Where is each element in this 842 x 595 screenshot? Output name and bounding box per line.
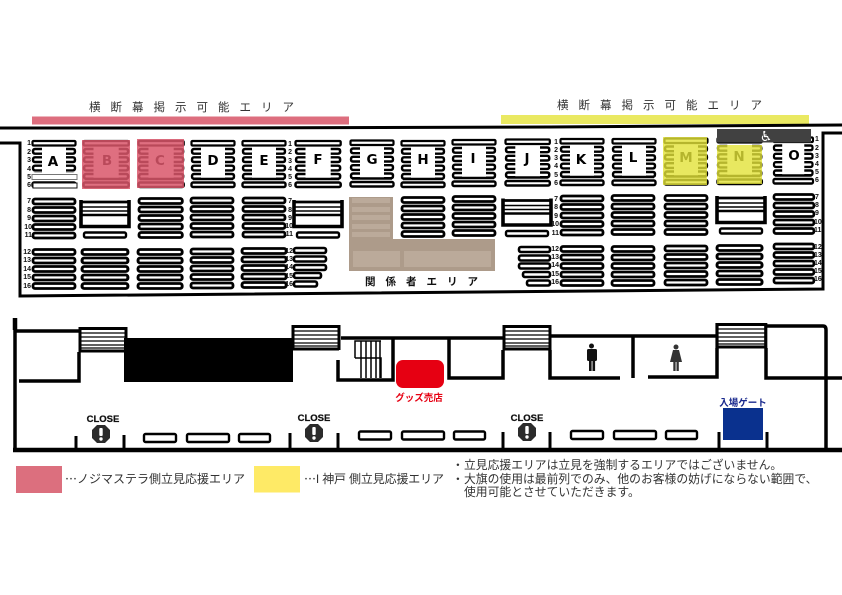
row numbers: centre left: 13 (285, 256, 293, 263)
notes: ・ (452, 472, 464, 486)
row numbers: centre right: 11 (552, 230, 559, 237)
row numbers: centre left: 10 (285, 223, 293, 230)
row numbers: left: 13 (23, 257, 31, 264)
row numbers: centre right: 6 (554, 180, 558, 187)
black block (124, 338, 293, 382)
row numbers: centre right: 13 (551, 254, 559, 261)
row numbers: centre left: 5 (288, 174, 292, 181)
highlight: B and C blocks (82, 139, 184, 189)
row numbers: left: 16 (23, 283, 31, 290)
staff area (349, 197, 495, 271)
block letters: O (788, 148, 800, 164)
block letters: G (366, 152, 378, 168)
notes: 立見応援エリアは立見を強制するエリアではございません。 (464, 458, 782, 472)
block letters: A (48, 154, 59, 170)
banner label: left: 横断幕掲示可能エリア (89, 100, 304, 114)
concourse walls (15, 326, 842, 450)
seating blocks: rows 12-16 (33, 244, 814, 288)
block letters: E (259, 153, 269, 169)
row numbers: left: 1 (27, 140, 31, 147)
row numbers: left: 14 (23, 266, 31, 273)
block letters: C (155, 153, 165, 169)
gate posts (76, 432, 767, 449)
row numbers: left: 8 (27, 207, 31, 214)
row numbers: centre left (285, 141, 293, 288)
row numbers: centre left: 7 (288, 198, 292, 205)
block letters: F (313, 152, 323, 168)
inner staircase (355, 341, 381, 378)
staff area label: 関係者エリア (365, 275, 488, 288)
notes: ・ (452, 458, 464, 472)
row numbers: right: 5 (815, 169, 819, 176)
row numbers: centre left: 8 (288, 207, 292, 214)
block letters: I (470, 151, 476, 167)
row numbers: centre right (551, 139, 559, 286)
row numbers: left: 6 (27, 182, 31, 189)
row numbers: right: 6 (815, 177, 819, 184)
row numbers: left: 15 (23, 274, 31, 281)
row numbers: right: 9 (815, 210, 819, 217)
seating blocks: rows 7-11 (33, 194, 814, 238)
notes (452, 458, 817, 499)
row numbers: right: 8 (815, 202, 819, 209)
close label 1: CLOSE (87, 414, 119, 425)
row numbers: left: 2 (27, 149, 31, 156)
row numbers: left: 9 (27, 215, 31, 222)
block letters: M (679, 150, 693, 166)
row numbers: centre right: 1 (554, 139, 558, 146)
row numbers: right: 12 (814, 244, 822, 251)
row numbers: right: 4 (815, 161, 819, 168)
concourse floor line (13, 318, 842, 450)
row numbers: right: 13 (814, 252, 822, 259)
row numbers: left: 12 (23, 249, 31, 256)
block letters (48, 148, 800, 170)
warning icon 2 (305, 424, 323, 442)
row numbers: centre right: 4 (554, 163, 558, 170)
row numbers: centre left: 1 (288, 141, 292, 148)
banner bar: pink (32, 116, 349, 124)
row numbers: left: 10 (24, 224, 32, 231)
row numbers: right (814, 136, 822, 283)
row numbers: right: 10 (814, 219, 822, 226)
row numbers: centre right: 16 (551, 279, 559, 286)
row numbers: right: 11 (814, 227, 822, 234)
wheelchair bar (717, 129, 811, 145)
close label 3: CLOSE (511, 413, 543, 424)
close label 2: CLOSE (298, 413, 330, 424)
row numbers: centre right: 2 (554, 147, 558, 154)
block letters: K (576, 152, 587, 168)
block letters: J (523, 151, 530, 167)
row numbers: centre right: 3 (554, 155, 558, 162)
wheelchair bar: ♿ (760, 129, 772, 145)
row numbers: right: 14 (814, 260, 822, 267)
warning icon 3 (518, 423, 536, 441)
row numbers: centre left: 16 (285, 281, 293, 288)
row numbers: right: 16 (814, 276, 822, 283)
row numbers: centre right: 8 (554, 204, 558, 211)
block letters: B (102, 153, 112, 169)
icon: men (587, 344, 597, 371)
row numbers: right: 15 (814, 268, 822, 275)
row numbers: centre left: 12 (285, 248, 293, 255)
row numbers: left: 11 (25, 232, 32, 239)
entrance gate (723, 408, 763, 440)
row numbers: left (23, 140, 32, 290)
row numbers: centre right: 15 (551, 271, 559, 278)
row numbers: centre right: 12 (551, 246, 559, 253)
banner label: right: 横断幕掲示可能エリア (557, 98, 772, 112)
row numbers: centre left: 9 (288, 215, 292, 222)
block letters: H (417, 152, 429, 168)
row numbers: centre left: 2 (288, 149, 292, 156)
highlight: M and N blocks (663, 137, 762, 185)
block letters: D (207, 153, 219, 169)
row numbers: centre left: 6 (288, 182, 292, 189)
icon: women (670, 344, 682, 371)
row numbers: centre left: 15 (285, 273, 293, 280)
warning icon 1 (92, 425, 110, 443)
row numbers: right: 3 (815, 153, 819, 160)
row numbers: centre right: 7 (554, 196, 558, 203)
row numbers: centre left: 4 (288, 166, 292, 173)
goods shop (396, 360, 444, 388)
block letters: L (629, 150, 638, 166)
entrance gate label: 入場ゲート (719, 397, 767, 409)
row numbers: right: 7 (815, 194, 819, 201)
banner bar: yellow (501, 115, 809, 124)
row numbers: right: 1 (815, 136, 819, 143)
legend swatch: pink (16, 466, 62, 493)
notes: 使用可能とさせていただきます。 (464, 485, 640, 499)
row numbers: centre right: 5 (554, 172, 558, 179)
row numbers: centre right: 14 (551, 262, 559, 269)
row numbers: left: 3 (27, 157, 31, 164)
block letters: N (733, 149, 745, 165)
row numbers: centre left: 11 (286, 231, 293, 238)
legend text: pink: …ノジマステラ側立見応援エリア (65, 470, 245, 487)
row numbers: centre right: 10 (551, 221, 559, 228)
benches (144, 431, 697, 442)
legend swatch: yellow (254, 466, 300, 492)
row numbers: left: 4 (27, 166, 31, 173)
row numbers: centre left: 14 (285, 264, 293, 271)
stairs: concourse (80, 323, 766, 352)
notes: 大旗の使用は最前列でのみ、他のお客様の妨げにならない範囲で、 (464, 472, 817, 486)
row numbers: right: 2 (815, 145, 819, 152)
seating blocks: rows 1-6 (30, 138, 813, 188)
arena outer frame (0, 125, 842, 296)
row numbers: left: 7 (27, 198, 31, 205)
goods shop label: グッズ売店 (395, 392, 443, 404)
legend text: yellow: …I 神戸 側立見応援エリア (304, 470, 444, 487)
row numbers: centre left: 3 (288, 158, 292, 165)
row numbers: left: 5 (27, 174, 31, 181)
row numbers: centre right: 9 (554, 213, 558, 220)
